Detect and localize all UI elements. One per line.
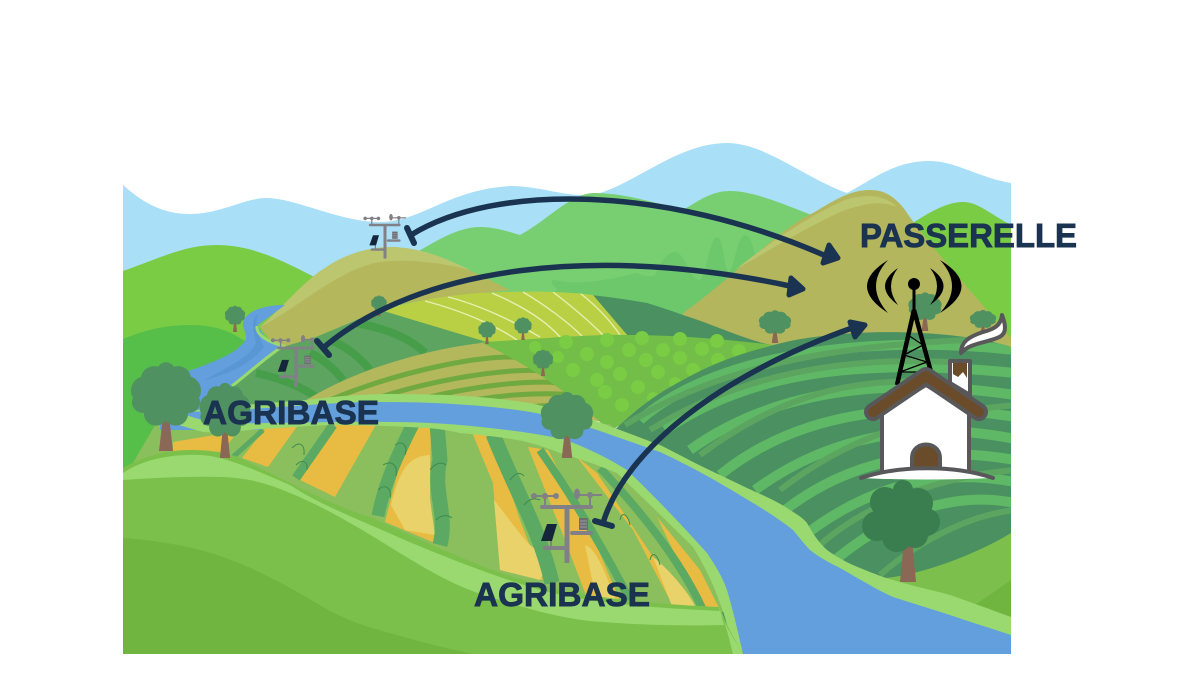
tree: far right <box>970 310 996 335</box>
right striped field <box>616 332 1011 626</box>
bank edge near river <box>718 605 743 654</box>
label: passerelle: PASSERELLE <box>860 217 1077 254</box>
hill light band <box>123 455 724 625</box>
infographic: farm landscape with sensor network <box>123 143 1076 654</box>
left near hill <box>123 325 244 468</box>
tree: small left hill <box>225 306 245 332</box>
tree: large dark <box>862 480 940 582</box>
crop vines <box>292 443 660 565</box>
lower right meadow <box>886 533 1011 604</box>
lower right meadow shadow <box>976 580 1011 617</box>
arrow: crop field to gateway <box>595 322 865 526</box>
left river arm <box>160 305 285 430</box>
house ground <box>861 468 993 480</box>
landscape scene <box>123 143 1020 654</box>
arrow: left field to gateway <box>317 265 803 355</box>
yellow green field <box>385 292 627 342</box>
house body <box>882 385 969 472</box>
station: left field <box>271 335 320 387</box>
crop field base <box>133 424 724 612</box>
far right green hill <box>914 202 1011 338</box>
green striped field <box>234 312 486 404</box>
tree: behind tower <box>908 292 942 331</box>
label: agribase bottom: AGRIBASE <box>474 576 650 613</box>
door <box>912 444 940 469</box>
tower <box>897 285 931 385</box>
roof <box>873 376 979 412</box>
river arm shade <box>205 314 264 380</box>
foreground hill <box>123 450 743 654</box>
background green hills <box>400 191 810 306</box>
tree: field two <box>514 317 532 340</box>
river bank <box>165 394 1011 654</box>
tree: large left <box>131 362 201 451</box>
smoke <box>961 315 1005 353</box>
label: agribase left: AGRIBASE <box>203 394 379 431</box>
left olive hill highlight <box>260 247 470 327</box>
sky and far mountains <box>123 143 1011 331</box>
tree: orchard <box>533 350 553 376</box>
hill shadow <box>123 538 473 654</box>
green bank of the left arm <box>232 326 283 386</box>
chimney soot <box>953 363 967 378</box>
tree: olive mountain <box>759 310 791 343</box>
tree: second left <box>200 383 250 458</box>
crop field stripes <box>173 423 720 610</box>
lower green hill with poplars <box>552 235 755 315</box>
striped olive field <box>306 343 622 426</box>
orchard field <box>480 335 775 432</box>
tree: olive hill <box>371 296 387 316</box>
left olive hill <box>260 247 510 347</box>
station: crop field <box>531 488 602 563</box>
chimney <box>950 361 970 395</box>
river water <box>180 402 1011 654</box>
right olive mountain <box>683 190 1011 360</box>
left far hill <box>123 245 330 346</box>
arrow: hilltop to gateway <box>407 199 838 263</box>
orchard dots <box>529 331 746 412</box>
gateway: tower and house <box>861 260 1005 480</box>
dark green strip <box>593 295 768 344</box>
signal waves <box>867 260 962 313</box>
tree: field one <box>478 321 496 344</box>
station: hilltop <box>363 214 406 259</box>
tree: riverside <box>541 392 593 458</box>
olive mountain highlight <box>735 196 897 270</box>
